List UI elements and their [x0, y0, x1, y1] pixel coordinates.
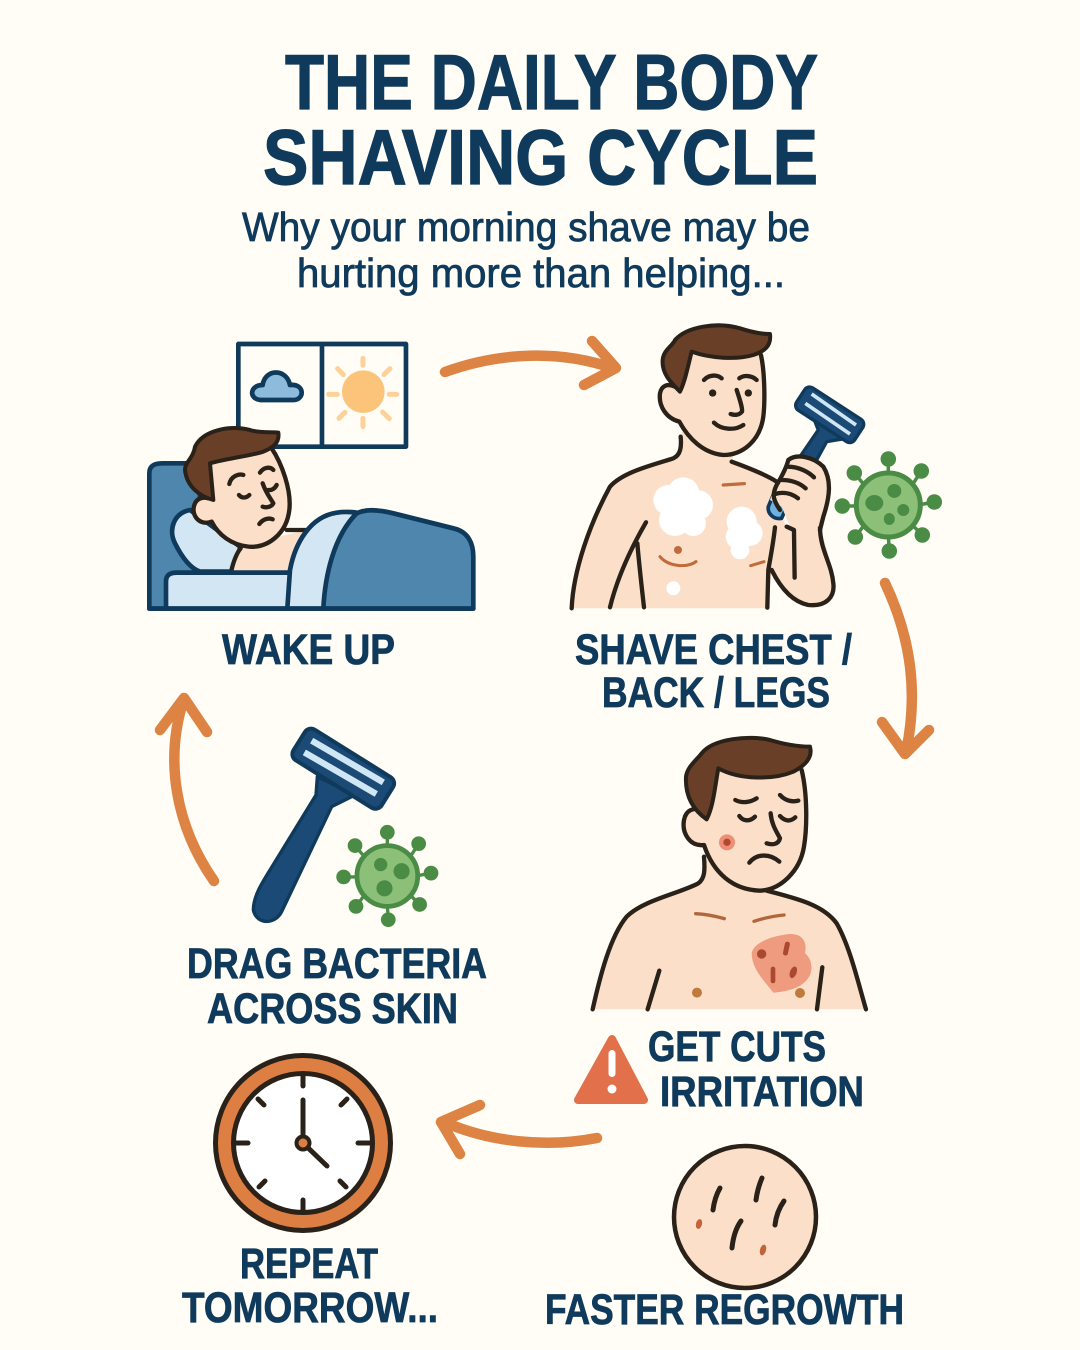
panel: cuts and irritation	[593, 738, 866, 1009]
subtitle: Why your morning shave may be	[242, 204, 810, 250]
icon: germ	[338, 827, 437, 925]
label: shave chest: BACK / LEGS	[602, 669, 830, 717]
label: drag bacteria: DRAG BACTERIA	[187, 940, 487, 988]
title: THE DAILY BODY	[285, 38, 818, 126]
arrow: cuts to regrowth and repeat	[441, 1105, 597, 1154]
label: repeat tomorrow	[182, 1240, 438, 1332]
label: get cuts: IRRITATION	[660, 1068, 864, 1116]
label: drag bacteria	[187, 940, 487, 1033]
title: SHAVING CYCLE	[263, 113, 818, 201]
icon: razor	[253, 726, 397, 921]
arrow: repeat to wake up	[160, 698, 214, 881]
label: repeat tomorrow: REPEAT	[240, 1240, 378, 1288]
icon: warning triangle	[578, 1039, 644, 1100]
title	[263, 38, 818, 201]
label: get cuts	[648, 1023, 864, 1116]
icon: window with cloud and sun	[238, 344, 406, 447]
label: get cuts: GET CUTS	[648, 1023, 826, 1071]
arrow: shave to cuts	[882, 583, 929, 754]
icon: germ	[836, 453, 940, 557]
icon: shirtless man	[572, 325, 834, 608]
panel: razor with bacteria	[253, 726, 437, 925]
subtitle	[242, 204, 810, 296]
label: shave chest: SHAVE CHEST /	[575, 626, 852, 674]
label: repeat tomorrow: TOMORROW...	[182, 1284, 438, 1332]
arrow: wake up to shave	[445, 341, 616, 385]
label: faster regrowth: FASTER REGROWTH	[545, 1286, 904, 1334]
icon: sad man with rash	[593, 738, 866, 1009]
icon: sleeping man in bed	[149, 428, 473, 609]
icon: razor in hand	[768, 385, 866, 578]
icon: clock	[216, 1056, 390, 1230]
panel: shave chest	[572, 325, 940, 608]
panel: wake up	[149, 344, 473, 609]
subtitle: hurting more than helping...	[297, 250, 785, 296]
foam patches	[653, 477, 763, 595]
label: shave chest	[575, 626, 852, 717]
icon: skin regrowth circle	[674, 1146, 816, 1288]
label: drag bacteria: ACROSS SKIN	[207, 985, 458, 1033]
label: wake up: WAKE UP	[222, 626, 395, 674]
